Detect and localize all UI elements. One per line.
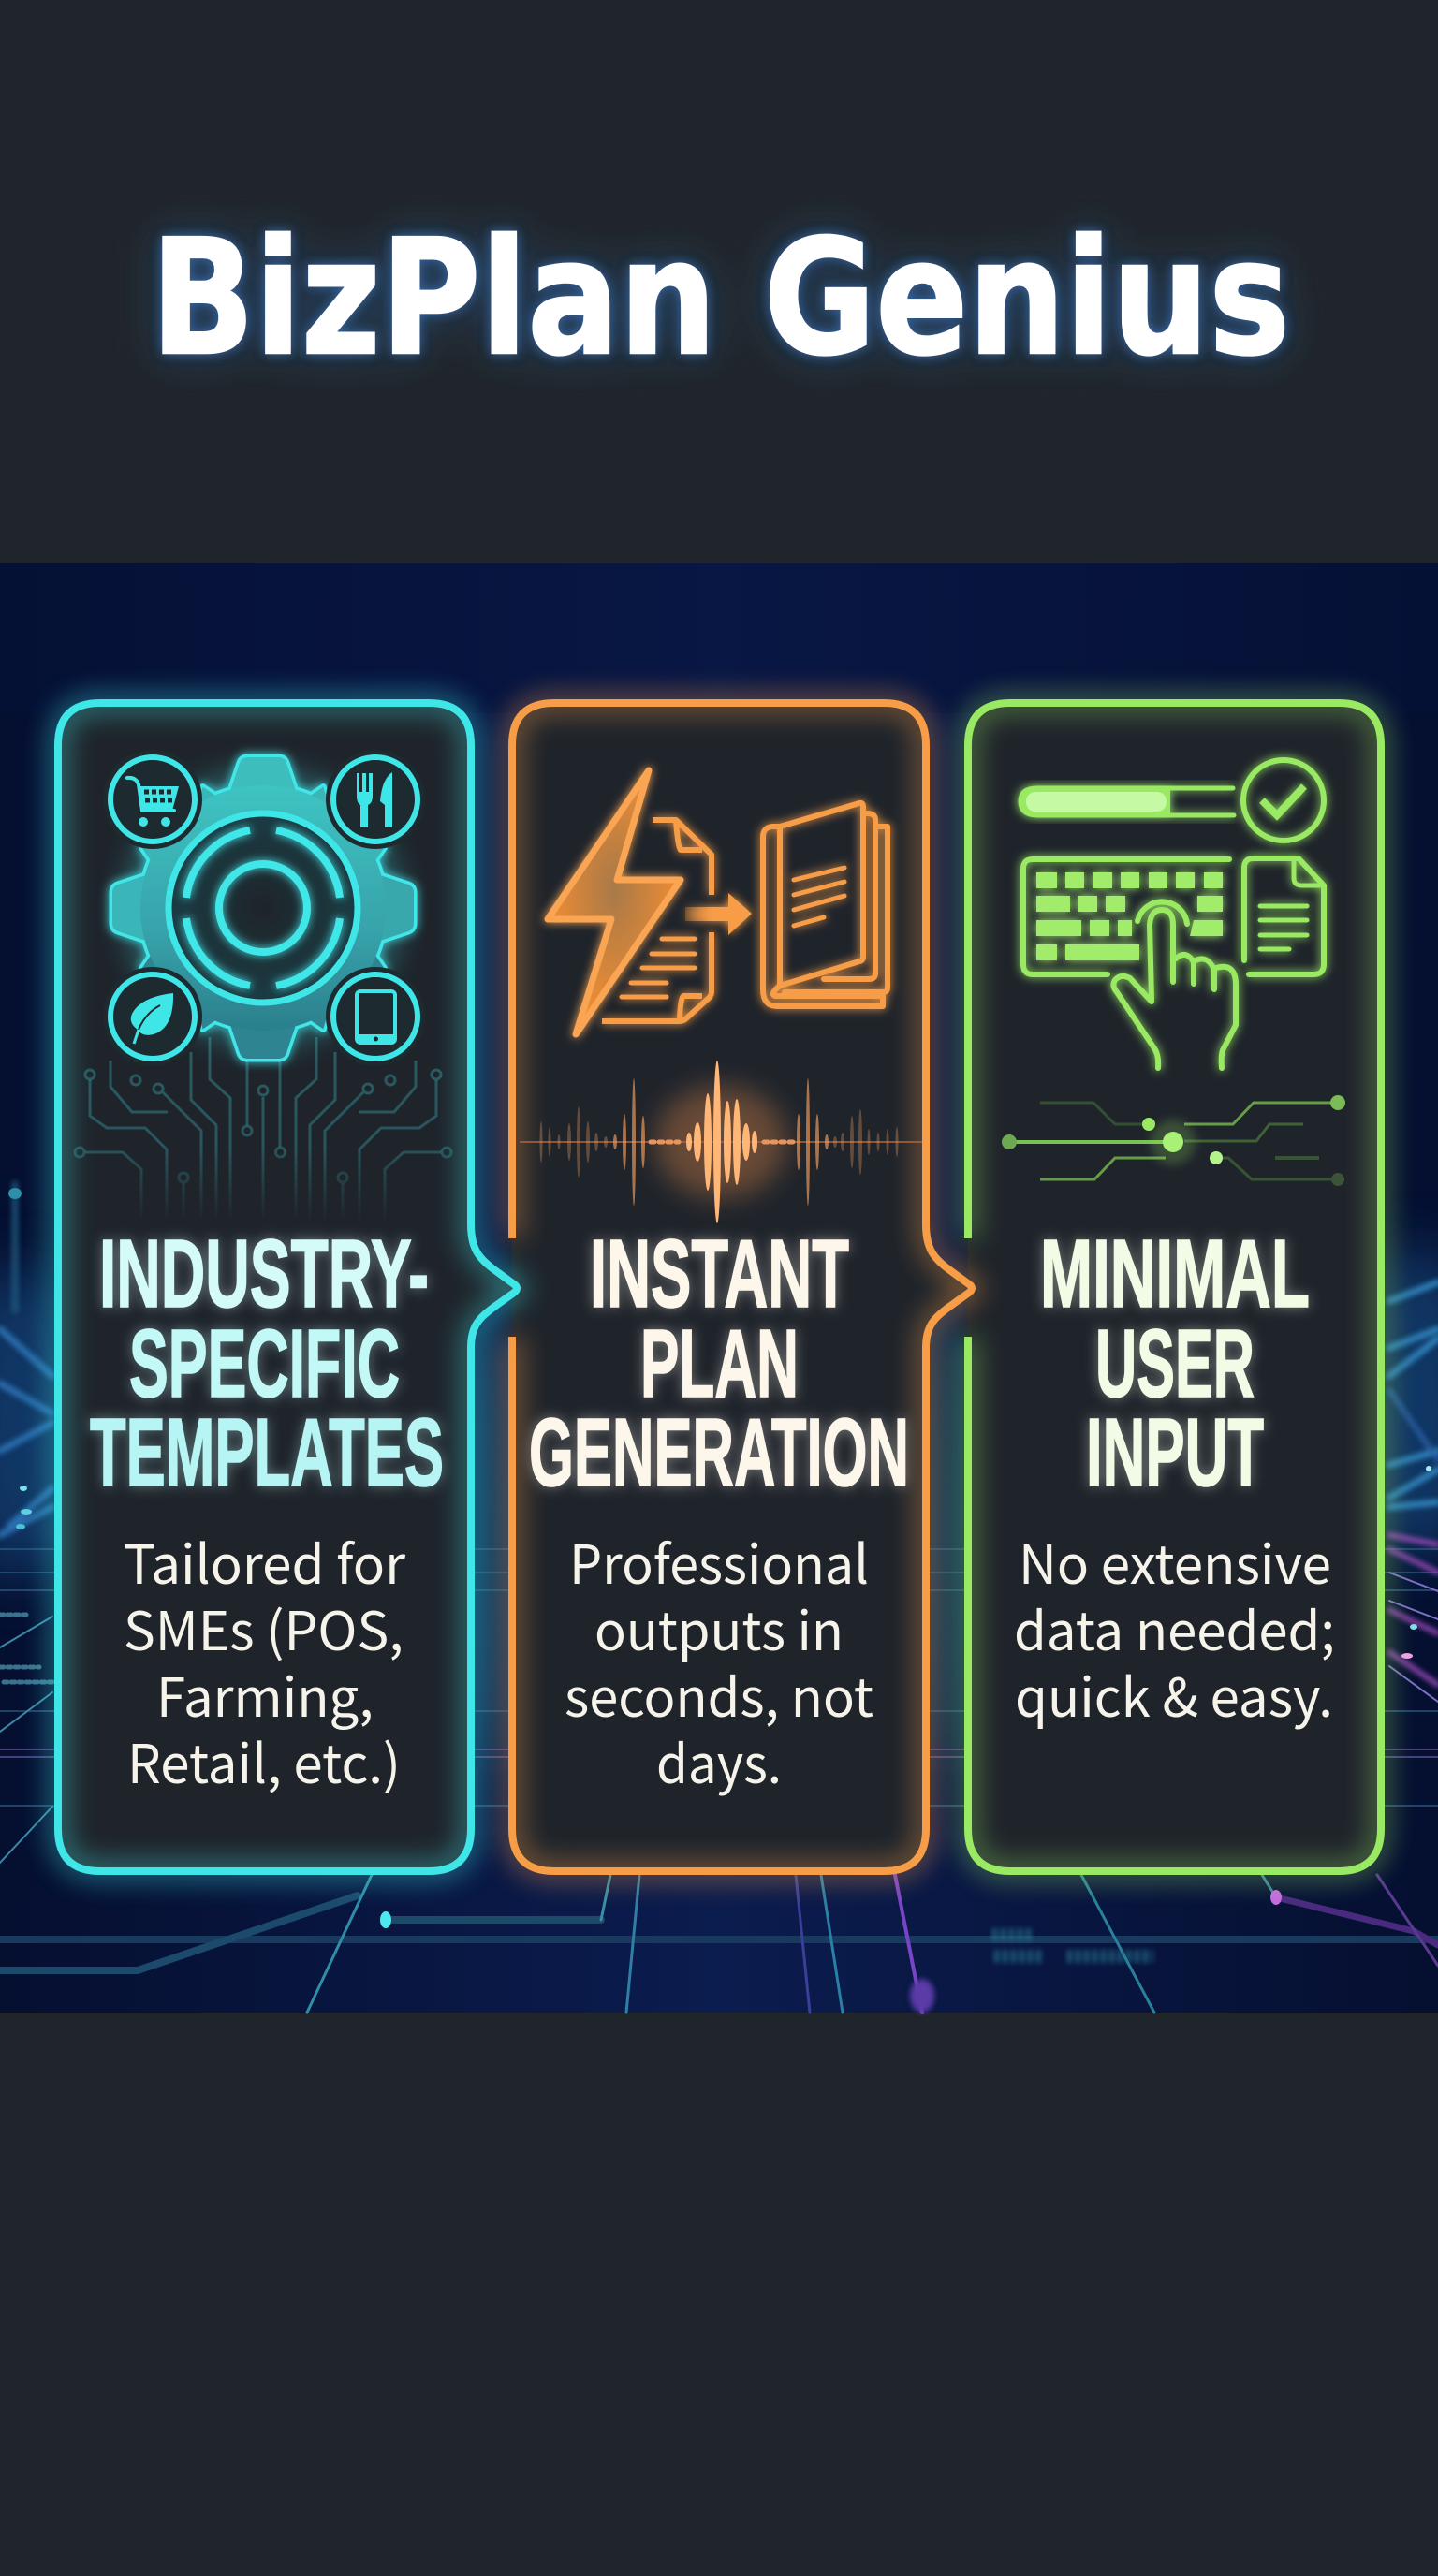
chart: orange sound wave	[520, 1061, 922, 1223]
text block: minimal input description: No extensive	[1019, 1523, 1331, 1600]
text block: industry templates description: Farming,	[156, 1656, 374, 1733]
heading: instant plan generation: PLAN	[640, 1310, 799, 1417]
icon: keyboard	[1023, 859, 1229, 974]
panel: circuit background band	[0, 564, 1438, 2012]
heading: industry-specific templates	[90, 1220, 444, 1506]
heading: industry-specific templates: INDUSTRY-	[99, 1220, 429, 1327]
text block: industry templates description: Tailored for	[124, 1523, 406, 1600]
heading: minimal user input: INPUT	[1086, 1398, 1264, 1506]
text block: instant plan description	[565, 1523, 873, 1799]
panel: instant plan generation	[492, 703, 972, 1871]
icon: pointing hand	[1113, 901, 1236, 1068]
heading: industry-specific templates: TEMPLATES	[90, 1398, 444, 1506]
text block: instant plan description: days.	[656, 1722, 782, 1799]
arrow: document to book	[685, 893, 752, 935]
icon: progress bar	[1020, 788, 1234, 815]
document outline	[602, 820, 712, 1021]
icon: gear with industry icons	[103, 750, 425, 1066]
chart: green circuit traces	[1002, 1095, 1345, 1186]
icon: check circle	[1243, 760, 1324, 841]
central bars	[686, 1061, 757, 1223]
text block: instant plan description: outputs in	[594, 1589, 844, 1666]
text block: minimal input description	[1014, 1523, 1335, 1733]
icon: lightning bolt and document	[548, 770, 712, 1034]
heading: instant plan generation: GENERATION	[529, 1398, 909, 1506]
heading: instant plan generation: INSTANT	[590, 1220, 849, 1327]
icon: finished book	[763, 803, 888, 1006]
icon: document	[1244, 858, 1324, 974]
gear body	[112, 757, 414, 1059]
heading: instant plan generation	[529, 1220, 909, 1506]
text block: industry templates description: SMEs (POS,	[124, 1589, 404, 1666]
gear inner ring	[186, 830, 340, 986]
text block: industry templates description: Retail, etc.)	[127, 1722, 401, 1799]
heading: industry-specific templates: SPECIFIC	[129, 1310, 400, 1417]
icon: tablet	[326, 967, 425, 1066]
panel: industry-specific templates	[58, 703, 517, 1871]
heading: minimal user input	[1040, 1220, 1310, 1506]
keyboard keys	[1036, 872, 1223, 960]
icon: fork and knife	[326, 750, 425, 849]
text block: instant plan description: seconds, not	[565, 1656, 873, 1733]
panel: minimal user input	[947, 703, 1381, 1871]
heading: minimal user input: USER	[1095, 1310, 1255, 1417]
text block: instant plan description: Professional	[569, 1523, 869, 1600]
icon: shopping cart	[103, 750, 202, 849]
text block: minimal input description: data needed;	[1014, 1589, 1335, 1666]
chart: circuit traces under gear	[75, 1037, 451, 1221]
bottom circuit traces	[0, 1875, 1438, 2012]
text block: minimal input description: quick & easy.	[1015, 1656, 1333, 1733]
text block: industry templates description	[124, 1523, 406, 1799]
icon: leaf	[103, 967, 202, 1066]
